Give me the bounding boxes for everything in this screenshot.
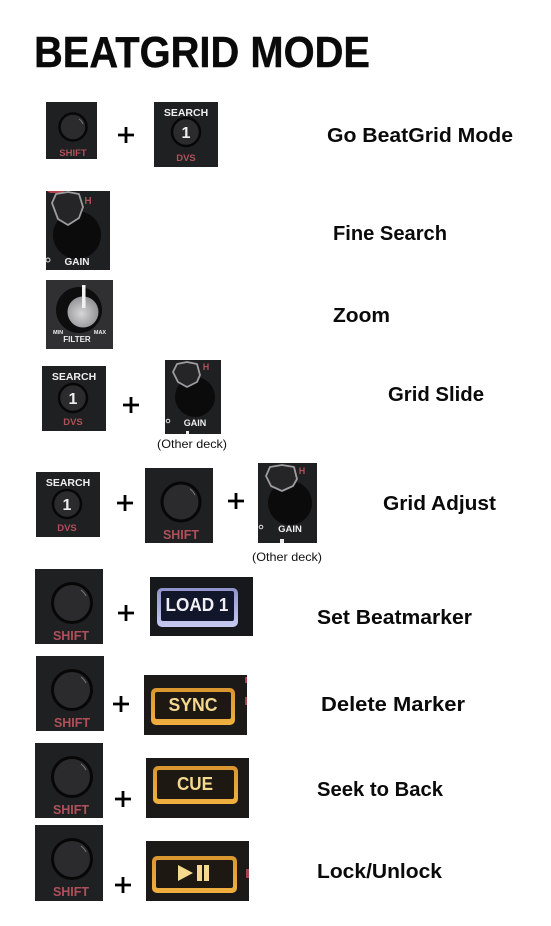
icon: shift button — [46, 102, 97, 159]
icon: search 1 button: 1 — [63, 497, 72, 514]
icon: shift button — [35, 825, 103, 901]
icon: shift button: SHIFT — [163, 528, 199, 542]
icon: filter knob: MAX — [94, 330, 106, 336]
icon: search 1 button: SEARCH — [52, 371, 96, 383]
title: BEATGRID MODE — [34, 28, 370, 77]
icon: shift button: SHIFT — [54, 716, 90, 730]
icon: search 1 button: DVS — [63, 417, 83, 428]
label: Grid Adjust — [383, 493, 496, 515]
plus sign — [113, 696, 129, 712]
icon: search 1 button: SEARCH — [46, 477, 90, 489]
label: Grid Slide — [388, 384, 484, 406]
icon: shift button: SHIFT — [53, 629, 89, 643]
icon: load 1 button: LOAD 1 — [166, 595, 228, 615]
icon: shift button: SHIFT — [53, 885, 89, 899]
icon: gain knob, other deck: H — [203, 362, 209, 372]
icon: shift button — [145, 468, 213, 543]
plus sign — [117, 495, 133, 511]
icon: shift button — [36, 656, 104, 731]
plus sign — [115, 877, 131, 893]
row: Go BeatGrid Mode — [46, 102, 513, 167]
row: Set Beatmarker — [35, 569, 472, 644]
icon: sync button — [144, 675, 247, 735]
plus sign — [123, 397, 139, 413]
row: Zoom — [46, 280, 390, 349]
label: Seek to Back — [317, 779, 444, 801]
icon: cue button — [146, 758, 249, 818]
icon: load 1 button — [150, 577, 253, 636]
icon: gain knob: GAIN — [64, 257, 90, 268]
icon: gain knob, other deck: GAIN — [184, 418, 206, 428]
label: Lock/Unlock — [317, 861, 443, 883]
row: Seek to Back — [35, 743, 444, 818]
caption: other deck: (Other deck) — [252, 550, 322, 564]
icon: search 1 button: SEARCH — [164, 107, 208, 119]
icon: search 1 button: 1 — [69, 391, 78, 408]
icon: gain knob — [46, 191, 110, 270]
icon: shift button — [35, 743, 103, 818]
row: Grid Slide — [42, 360, 484, 451]
row: Lock/Unlock — [35, 825, 443, 901]
icon: shift button: SHIFT — [59, 148, 87, 159]
icon: search 1 button: 1 — [182, 125, 191, 142]
icon: filter knob — [46, 280, 113, 349]
label: Fine Search — [333, 223, 447, 245]
icon: search 1 button: DVS — [57, 523, 77, 534]
plus sign — [118, 127, 134, 143]
icon: play pause button — [146, 841, 249, 901]
icon: gain knob, other deck — [165, 360, 221, 434]
label: Zoom — [333, 305, 390, 327]
label: Set Beatmarker — [317, 607, 472, 629]
row: Fine Search — [46, 191, 447, 270]
plus sign — [228, 493, 244, 509]
icon: search 1 button — [36, 472, 100, 537]
icon: gain knob, other deck: GAIN — [278, 524, 302, 535]
icon: shift button: SHIFT — [53, 803, 89, 817]
row: Grid Adjust — [36, 463, 496, 564]
icon: gain knob, other deck — [258, 463, 317, 543]
label: Delete Marker — [321, 694, 465, 716]
icon: shift button — [35, 569, 103, 644]
caption: other deck: (Other deck) — [157, 437, 227, 451]
icon: search 1 button — [154, 102, 218, 167]
icon: search 1 button: DVS — [176, 153, 196, 164]
icon: sync button: SYNC — [168, 695, 218, 715]
icon: gain knob: H — [84, 196, 92, 207]
icon: filter knob: FILTER — [63, 335, 91, 344]
row: Delete Marker — [36, 656, 465, 735]
plus sign — [118, 605, 134, 621]
icon: cue button: CUE — [177, 774, 213, 794]
icon: gain knob, other deck: H — [299, 466, 305, 476]
plus sign — [115, 791, 131, 807]
label: Go BeatGrid Mode — [327, 125, 513, 147]
icon: filter knob: MIN — [53, 330, 63, 336]
icon: search 1 button — [42, 366, 106, 431]
